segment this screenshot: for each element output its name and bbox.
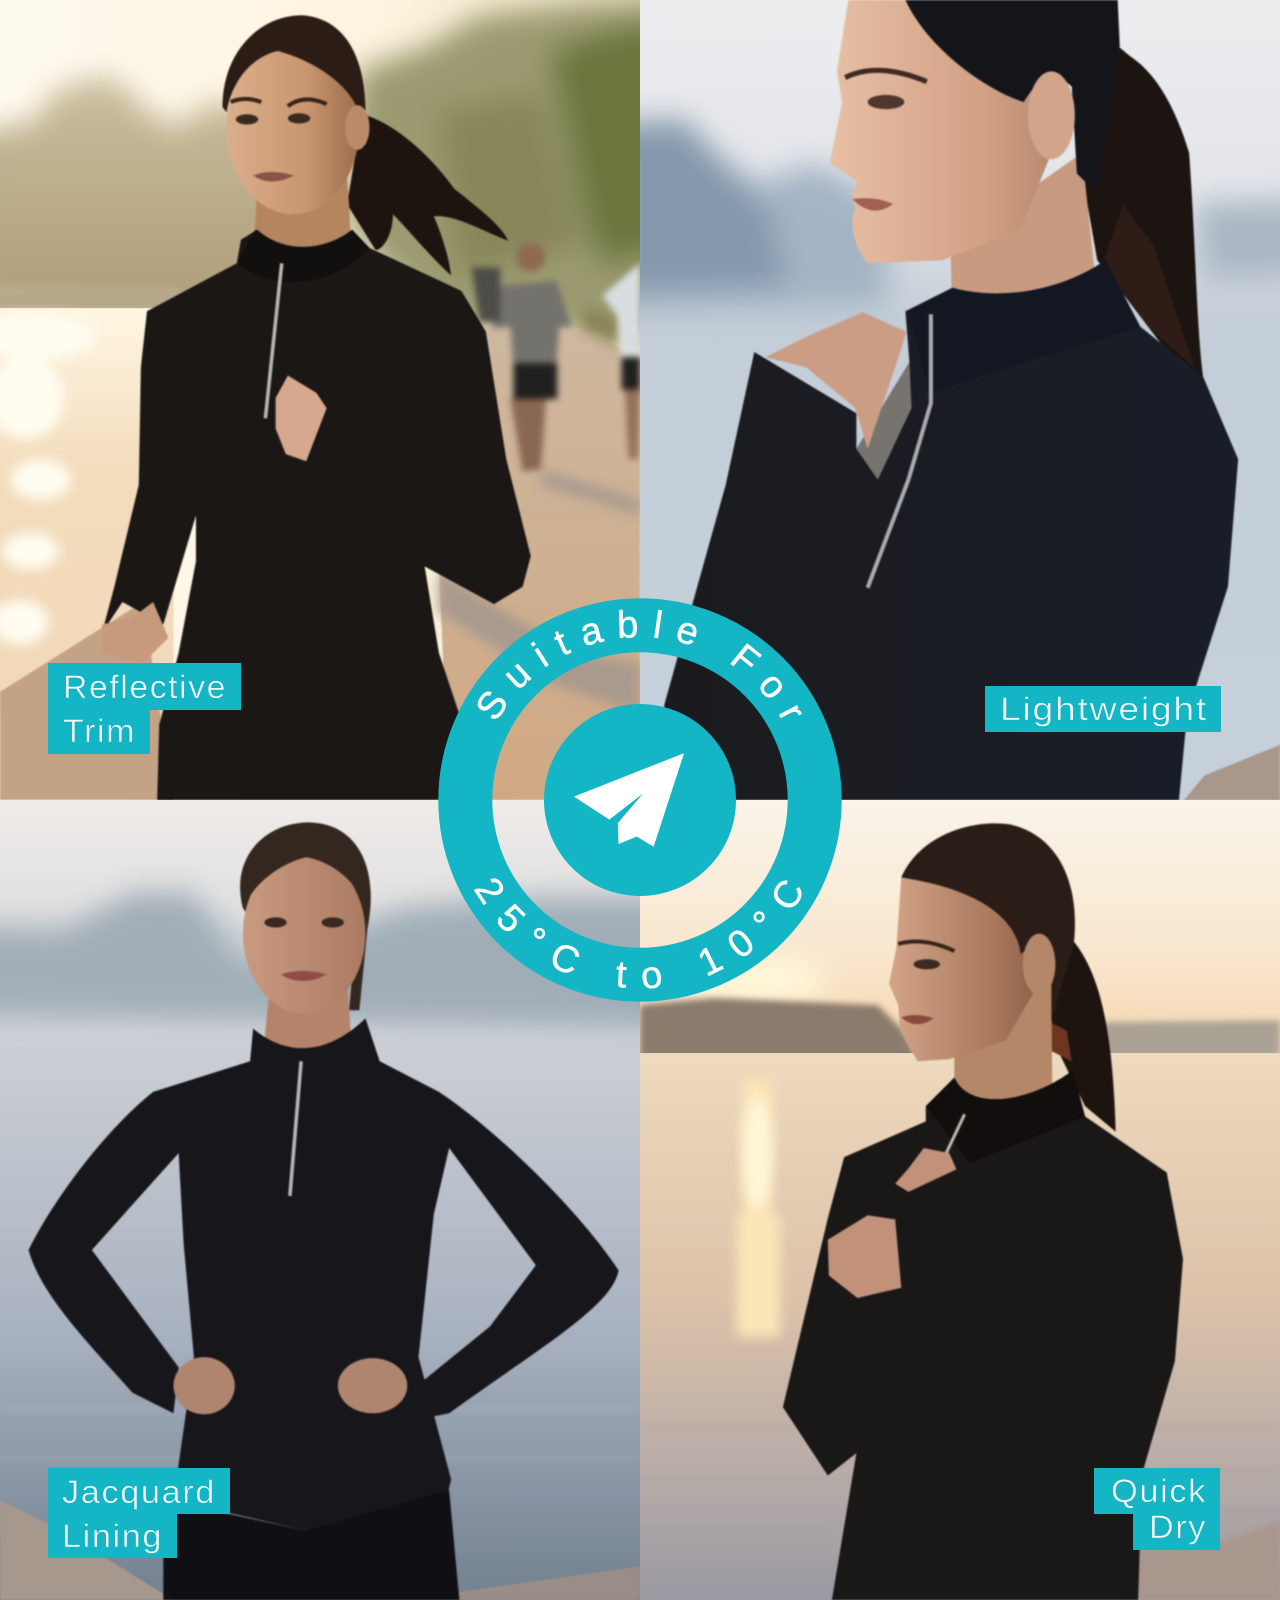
woman standing — [29, 822, 619, 1600]
photo: profile at sunset — [640, 800, 1280, 1600]
label: reflective trim — [48, 663, 241, 754]
label: lightweight: Lightweight — [1000, 691, 1208, 727]
label: jacquard lining: Jacquard — [62, 1474, 216, 1510]
label: lightweight — [985, 686, 1221, 732]
label: quick dry: Dry — [1149, 1509, 1207, 1545]
photo: profile by the misty water — [612, 0, 1280, 800]
label: jacquard lining — [48, 1468, 230, 1558]
label: reflective trim: Reflective — [63, 669, 227, 705]
woman in profile — [653, 0, 1238, 800]
label: quick dry: Quick — [1111, 1473, 1207, 1509]
badge centre disc — [544, 704, 736, 896]
woman running — [102, 15, 531, 800]
icon: paper plane — [575, 754, 683, 846]
badge ring — [465, 625, 815, 975]
badge text: temperature range: 25°C to 10°C — [474, 878, 802, 988]
photo: runner on the waterfront path — [0, 0, 674, 800]
label: jacquard lining: Lining — [62, 1518, 163, 1554]
badge: suitable temperature range — [438, 598, 842, 1002]
woman at sunset — [783, 823, 1183, 1600]
badge text: suitable for: Suitable For — [478, 610, 802, 719]
background runners — [472, 243, 640, 471]
label: reflective trim: Trim — [63, 713, 136, 749]
photo: hands on hips facing camera — [0, 800, 674, 1600]
label: quick dry — [1094, 1468, 1220, 1550]
